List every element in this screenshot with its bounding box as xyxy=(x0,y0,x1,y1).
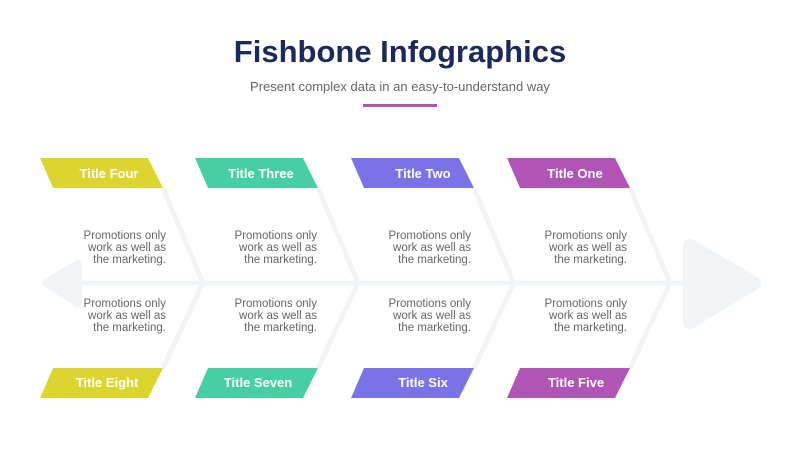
tag: Title Seven xyxy=(195,368,318,398)
text: upper col 3: Promotions only xyxy=(389,230,471,242)
text: upper col 3 xyxy=(389,230,471,266)
tag: Title Two xyxy=(351,158,474,188)
bones xyxy=(163,188,670,368)
text: lower col 3: Promotions only xyxy=(389,298,471,310)
text: lower col 2 xyxy=(235,298,317,334)
text: upper col 2: work as well as xyxy=(239,242,317,254)
text: upper col 1 xyxy=(84,230,166,266)
tag: Title One xyxy=(507,158,630,188)
text: lower col 4: work as well as xyxy=(549,310,627,322)
text: upper col 3: work as well as xyxy=(393,242,471,254)
text: upper col 2: the marketing. xyxy=(244,254,317,266)
text: lower col 1 xyxy=(84,298,166,334)
tag: Title Five xyxy=(507,368,630,398)
text: lower col 3 xyxy=(389,298,471,334)
text: upper col 4 xyxy=(545,230,627,266)
text: upper col 4: work as well as xyxy=(549,242,627,254)
text: lower col 2: work as well as xyxy=(239,310,317,322)
text: upper col 3: the marketing. xyxy=(398,254,471,266)
text: upper col 1: the marketing. xyxy=(93,254,166,266)
tag: Title Three: Title Three xyxy=(228,166,294,181)
tag: Title Two: Title Two xyxy=(395,166,451,181)
text: lower col 2: the marketing. xyxy=(244,322,317,334)
tag: Title Six: Title Six xyxy=(398,375,449,390)
text: lower col 4 xyxy=(545,298,627,334)
text: lower col 2: Promotions only xyxy=(235,298,317,310)
spine xyxy=(46,246,754,322)
tag: Title Seven: Title Seven xyxy=(224,375,292,390)
tag: Title Eight: Title Eight xyxy=(76,375,139,390)
text: upper col 2: Promotions only xyxy=(235,230,317,242)
tag: Title Four: Title Four xyxy=(80,166,138,181)
tag: Title One: Title One xyxy=(547,166,603,181)
text: upper col 1: Promotions only xyxy=(84,230,166,242)
text: lower col 1: the marketing. xyxy=(93,322,166,334)
tag: Title Three xyxy=(195,158,318,188)
underline accent xyxy=(363,104,437,107)
text: lower col 1: Promotions only xyxy=(84,298,166,310)
text: upper col 2 xyxy=(235,230,317,266)
text: upper col 4: the marketing. xyxy=(554,254,627,266)
text: lower col 4: the marketing. xyxy=(554,322,627,334)
text: lower col 4: Promotions only xyxy=(545,298,627,310)
text: upper col 4: Promotions only xyxy=(545,230,627,242)
text: upper col 1: work as well as xyxy=(88,242,166,254)
tag: Title Four xyxy=(40,158,163,188)
text: lower col 3: work as well as xyxy=(393,310,471,322)
tag: Title Eight xyxy=(40,368,163,398)
text: lower col 3: the marketing. xyxy=(398,322,471,334)
title: Fishbone Infographics xyxy=(234,34,566,69)
text: lower col 1: work as well as xyxy=(88,310,166,322)
tag: Title Five: Title Five xyxy=(548,375,604,390)
tag: Title Six xyxy=(351,368,474,398)
subtitle: Present complex data in an easy-to-understand way xyxy=(250,79,550,94)
